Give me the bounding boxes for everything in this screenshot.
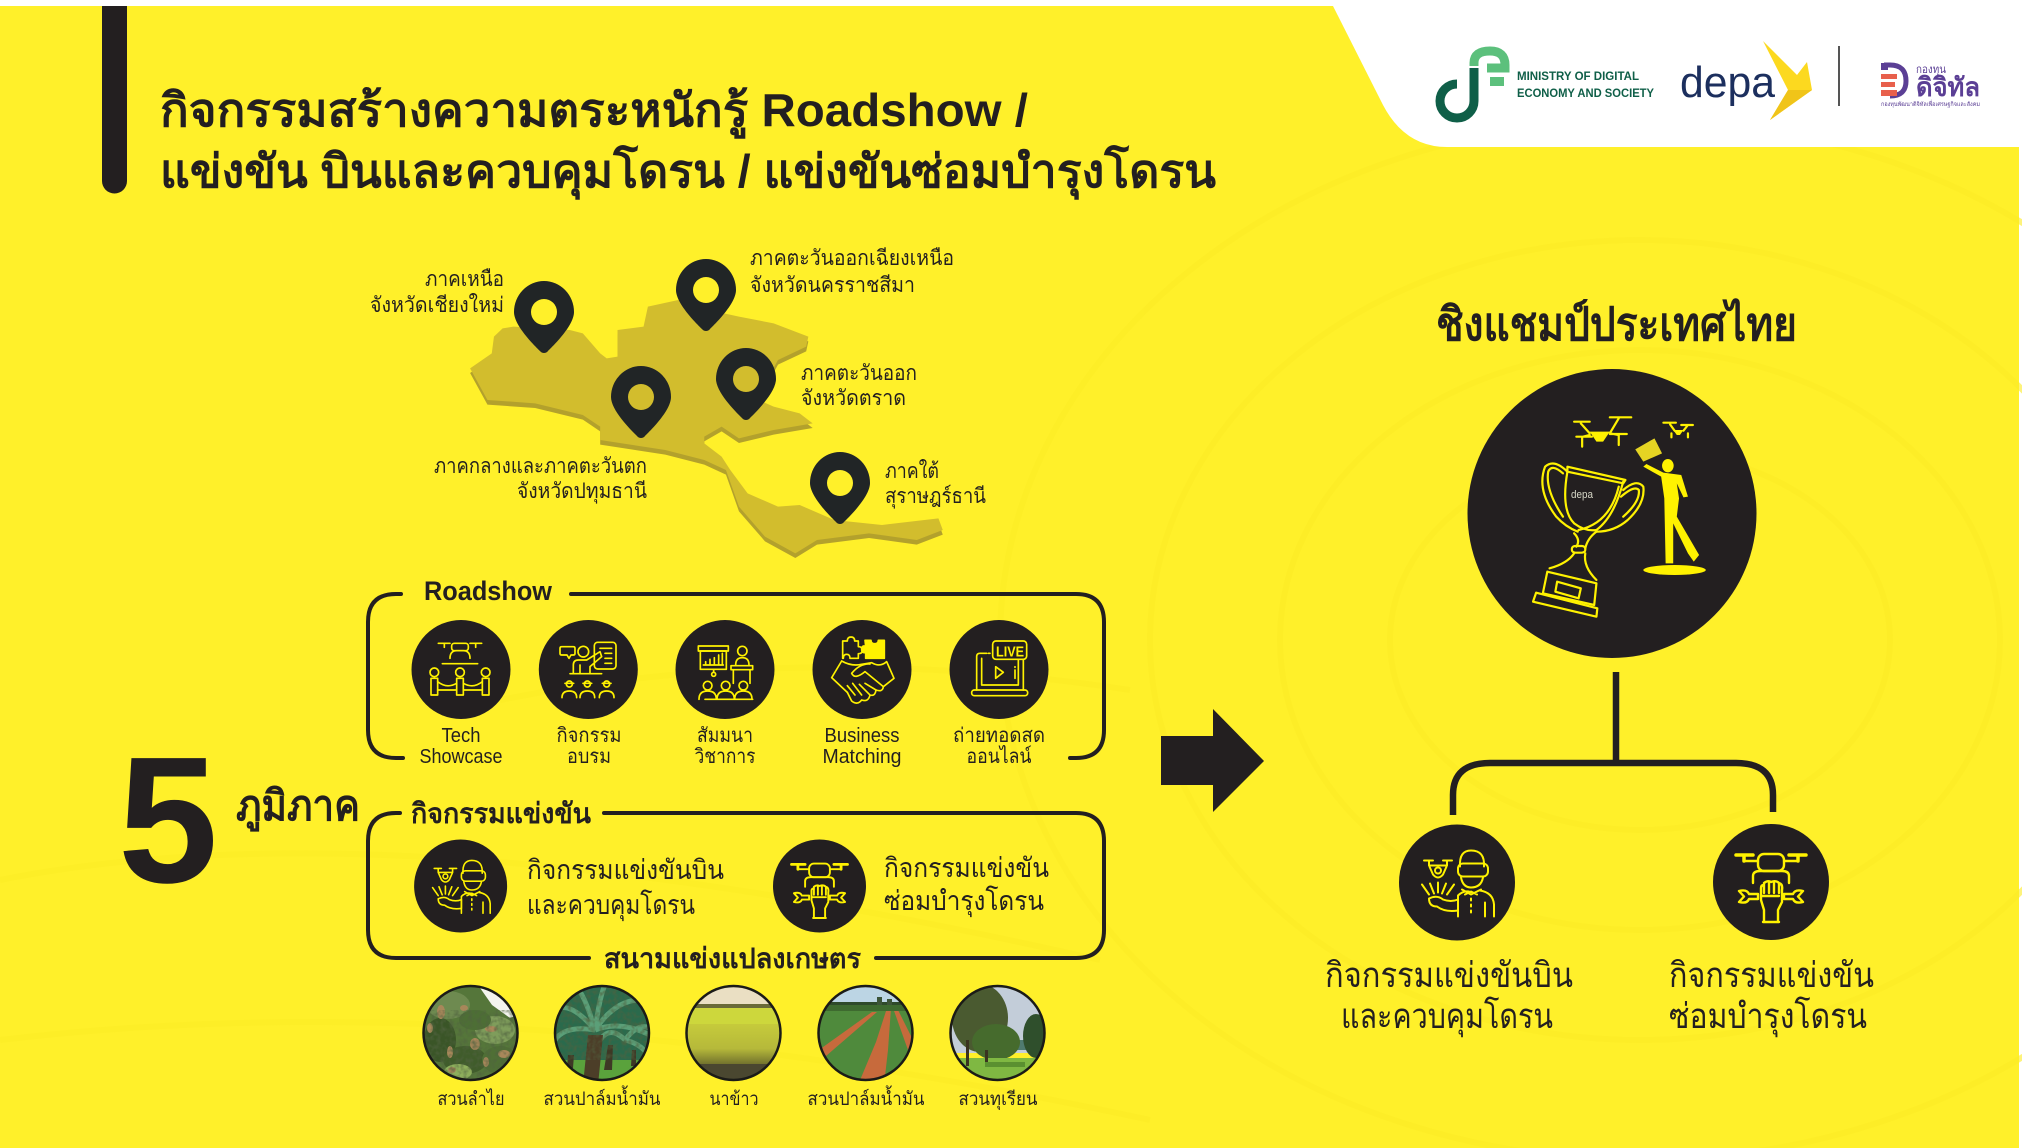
logo: ministry of digital economy and society: ECONOMY AND SOCIETY (1517, 86, 1654, 100)
label: south (885, 459, 986, 509)
label: tech showcase: Tech (442, 725, 480, 747)
icon: training (539, 620, 638, 719)
label: south: สุราษฎร์ธานี (885, 484, 986, 509)
label: training: กิจกรรม (556, 725, 622, 747)
photo: durian orchard (949, 984, 1046, 1082)
header white logo panel (1333, 6, 2022, 147)
photo: crop rows (816, 983, 918, 1085)
text: maintenance competition: ซ่อมบำรุงโดรน (884, 886, 1044, 918)
text: flying competition (1325, 956, 1573, 1037)
regions label: ภูมิภาค (236, 782, 360, 832)
label: business matching: Business (824, 725, 900, 747)
icon: live broadcast: LIVE (996, 644, 1024, 660)
label: business matching (822, 725, 902, 768)
labels: farm fields: สวนปาล์มน้ำมัน (808, 1085, 925, 1109)
text: flying competition (527, 855, 724, 922)
panel: competitions (368, 798, 1104, 974)
icon: business matching (812, 620, 912, 719)
text: maintenance competition: กิจกรรมแข่งขัน (1669, 956, 1874, 995)
label: live broadcast: ถ่ายทอดสด (953, 725, 1045, 747)
map of Thailand with region pins (370, 247, 986, 558)
label: north (370, 268, 504, 317)
label: east: จังหวัดตราด (801, 387, 906, 410)
logo: depa: depa (1680, 58, 1776, 107)
text: flying competition: และควบคุมโดรน (527, 890, 695, 922)
text: maintenance competition (884, 853, 1049, 918)
pin: north (514, 281, 574, 353)
logo: digital fund: ดิจิทัล (1916, 72, 1980, 102)
icon: trophy and drones (1468, 369, 1756, 658)
label: north: จังหวัดเชียงใหม่ (370, 293, 504, 317)
person with flag (1635, 438, 1706, 575)
label: northeast: จังหวัดนครราชสีมา (750, 274, 915, 297)
icon: tech showcase (412, 620, 510, 719)
label: north: ภาคเหนือ (425, 268, 504, 291)
label: northeast: ภาคตะวันออกเฉียงเหนือ (750, 247, 954, 270)
title: แข่งขัน บินและควบคุมโดรน / แข่งขันซ่อมบำรุงโดรน (160, 144, 1217, 200)
icon: seminar (676, 620, 774, 719)
title accent bar (102, 6, 127, 194)
depa mark on trophy: depa (1571, 489, 1594, 501)
icon: live broadcast (950, 620, 1048, 719)
logo: ministry of digital economy and society (1440, 51, 1654, 118)
heading: farm fields: สนามแข่งแปลงเกษตร (604, 943, 861, 974)
labels: farm fields: สวนปาล์มน้ำมัน (544, 1085, 661, 1109)
labels: farm fields (438, 1085, 1038, 1111)
pin: northeast (676, 259, 736, 331)
heading: competitions: กิจกรรมแข่งขัน (411, 798, 591, 829)
title (160, 84, 1217, 200)
text: flying competition: กิจกรรมแข่งขันบิน (1325, 956, 1573, 995)
pin: south (810, 452, 870, 524)
label: seminar: สัมมนา (697, 725, 753, 747)
big number 5: 5 (118, 720, 218, 921)
label: live broadcast: ออนไลน์ (966, 745, 1032, 768)
label: east: ภาคตะวันออก (801, 362, 917, 385)
text: flying competition: กิจกรรมแข่งขันบิน (527, 855, 724, 885)
connector tree (1453, 672, 1773, 815)
trophy (1533, 463, 1644, 617)
label: training (556, 725, 622, 768)
icon: maintenance competition (1713, 824, 1829, 940)
panel: roadshow (368, 576, 1104, 768)
photo: longan orchard (422, 984, 519, 1082)
label: business matching: Matching (822, 746, 902, 768)
label: live broadcast (953, 725, 1045, 768)
label: tech showcase: Showcase (420, 746, 502, 768)
photo: oil palm plantation (552, 983, 654, 1085)
logo: digital fund: กองทุน (1916, 64, 1946, 76)
logo: digital fund: กองทุนพัฒนาดิจิทัลเพื่อเศรษฐกิจและสังคม (1881, 100, 1980, 108)
labels: farm fields: สวนลำไย (438, 1088, 504, 1109)
logo: digital fund (1881, 63, 1980, 108)
label: central and west: จังหวัดปทุมธานี (517, 480, 647, 504)
photo: rice field (685, 984, 782, 1082)
label: tech showcase (420, 725, 502, 768)
label: south: ภาคใต้ (885, 459, 939, 483)
text: maintenance competition: กิจกรรมแข่งขัน (884, 853, 1049, 883)
icon: maintenance competition (773, 840, 866, 932)
icon: flying competition (1399, 824, 1515, 940)
label: training: อบรม (567, 746, 611, 768)
drones (1574, 417, 1693, 447)
text: maintenance competition (1669, 956, 1874, 1037)
label: central and west: ภาคกลางและภาคตะวันตก (434, 455, 647, 478)
label: seminar (694, 725, 756, 768)
heading: national championship: ชิงแชมป์ประเทศไทย (1436, 298, 1797, 350)
pin: east (716, 348, 776, 420)
icon: flying competition (414, 840, 507, 932)
pin: central (611, 366, 671, 438)
text: flying competition: และควบคุมโดรน (1341, 996, 1553, 1037)
title: กิจกรรมสร้างความตระหนักรู้ Roadshow / (160, 84, 1028, 139)
heading: roadshow: Roadshow (424, 576, 553, 606)
label: seminar: วิชาการ (694, 746, 756, 768)
logo: depa (1680, 41, 1812, 120)
text: maintenance competition: ซ่อมบำรุงโดรน (1669, 996, 1867, 1037)
label: east (801, 362, 917, 410)
logo divider (1838, 46, 1840, 106)
logo: ministry of digital economy and society: MINISTRY OF DIGITAL (1517, 69, 1639, 83)
label: central and west (434, 455, 647, 504)
labels: farm fields: สวนทุเรียน (958, 1088, 1038, 1111)
arrow (1161, 709, 1264, 812)
label: northeast (750, 247, 954, 297)
labels: farm fields: นาข้าว (710, 1088, 758, 1109)
